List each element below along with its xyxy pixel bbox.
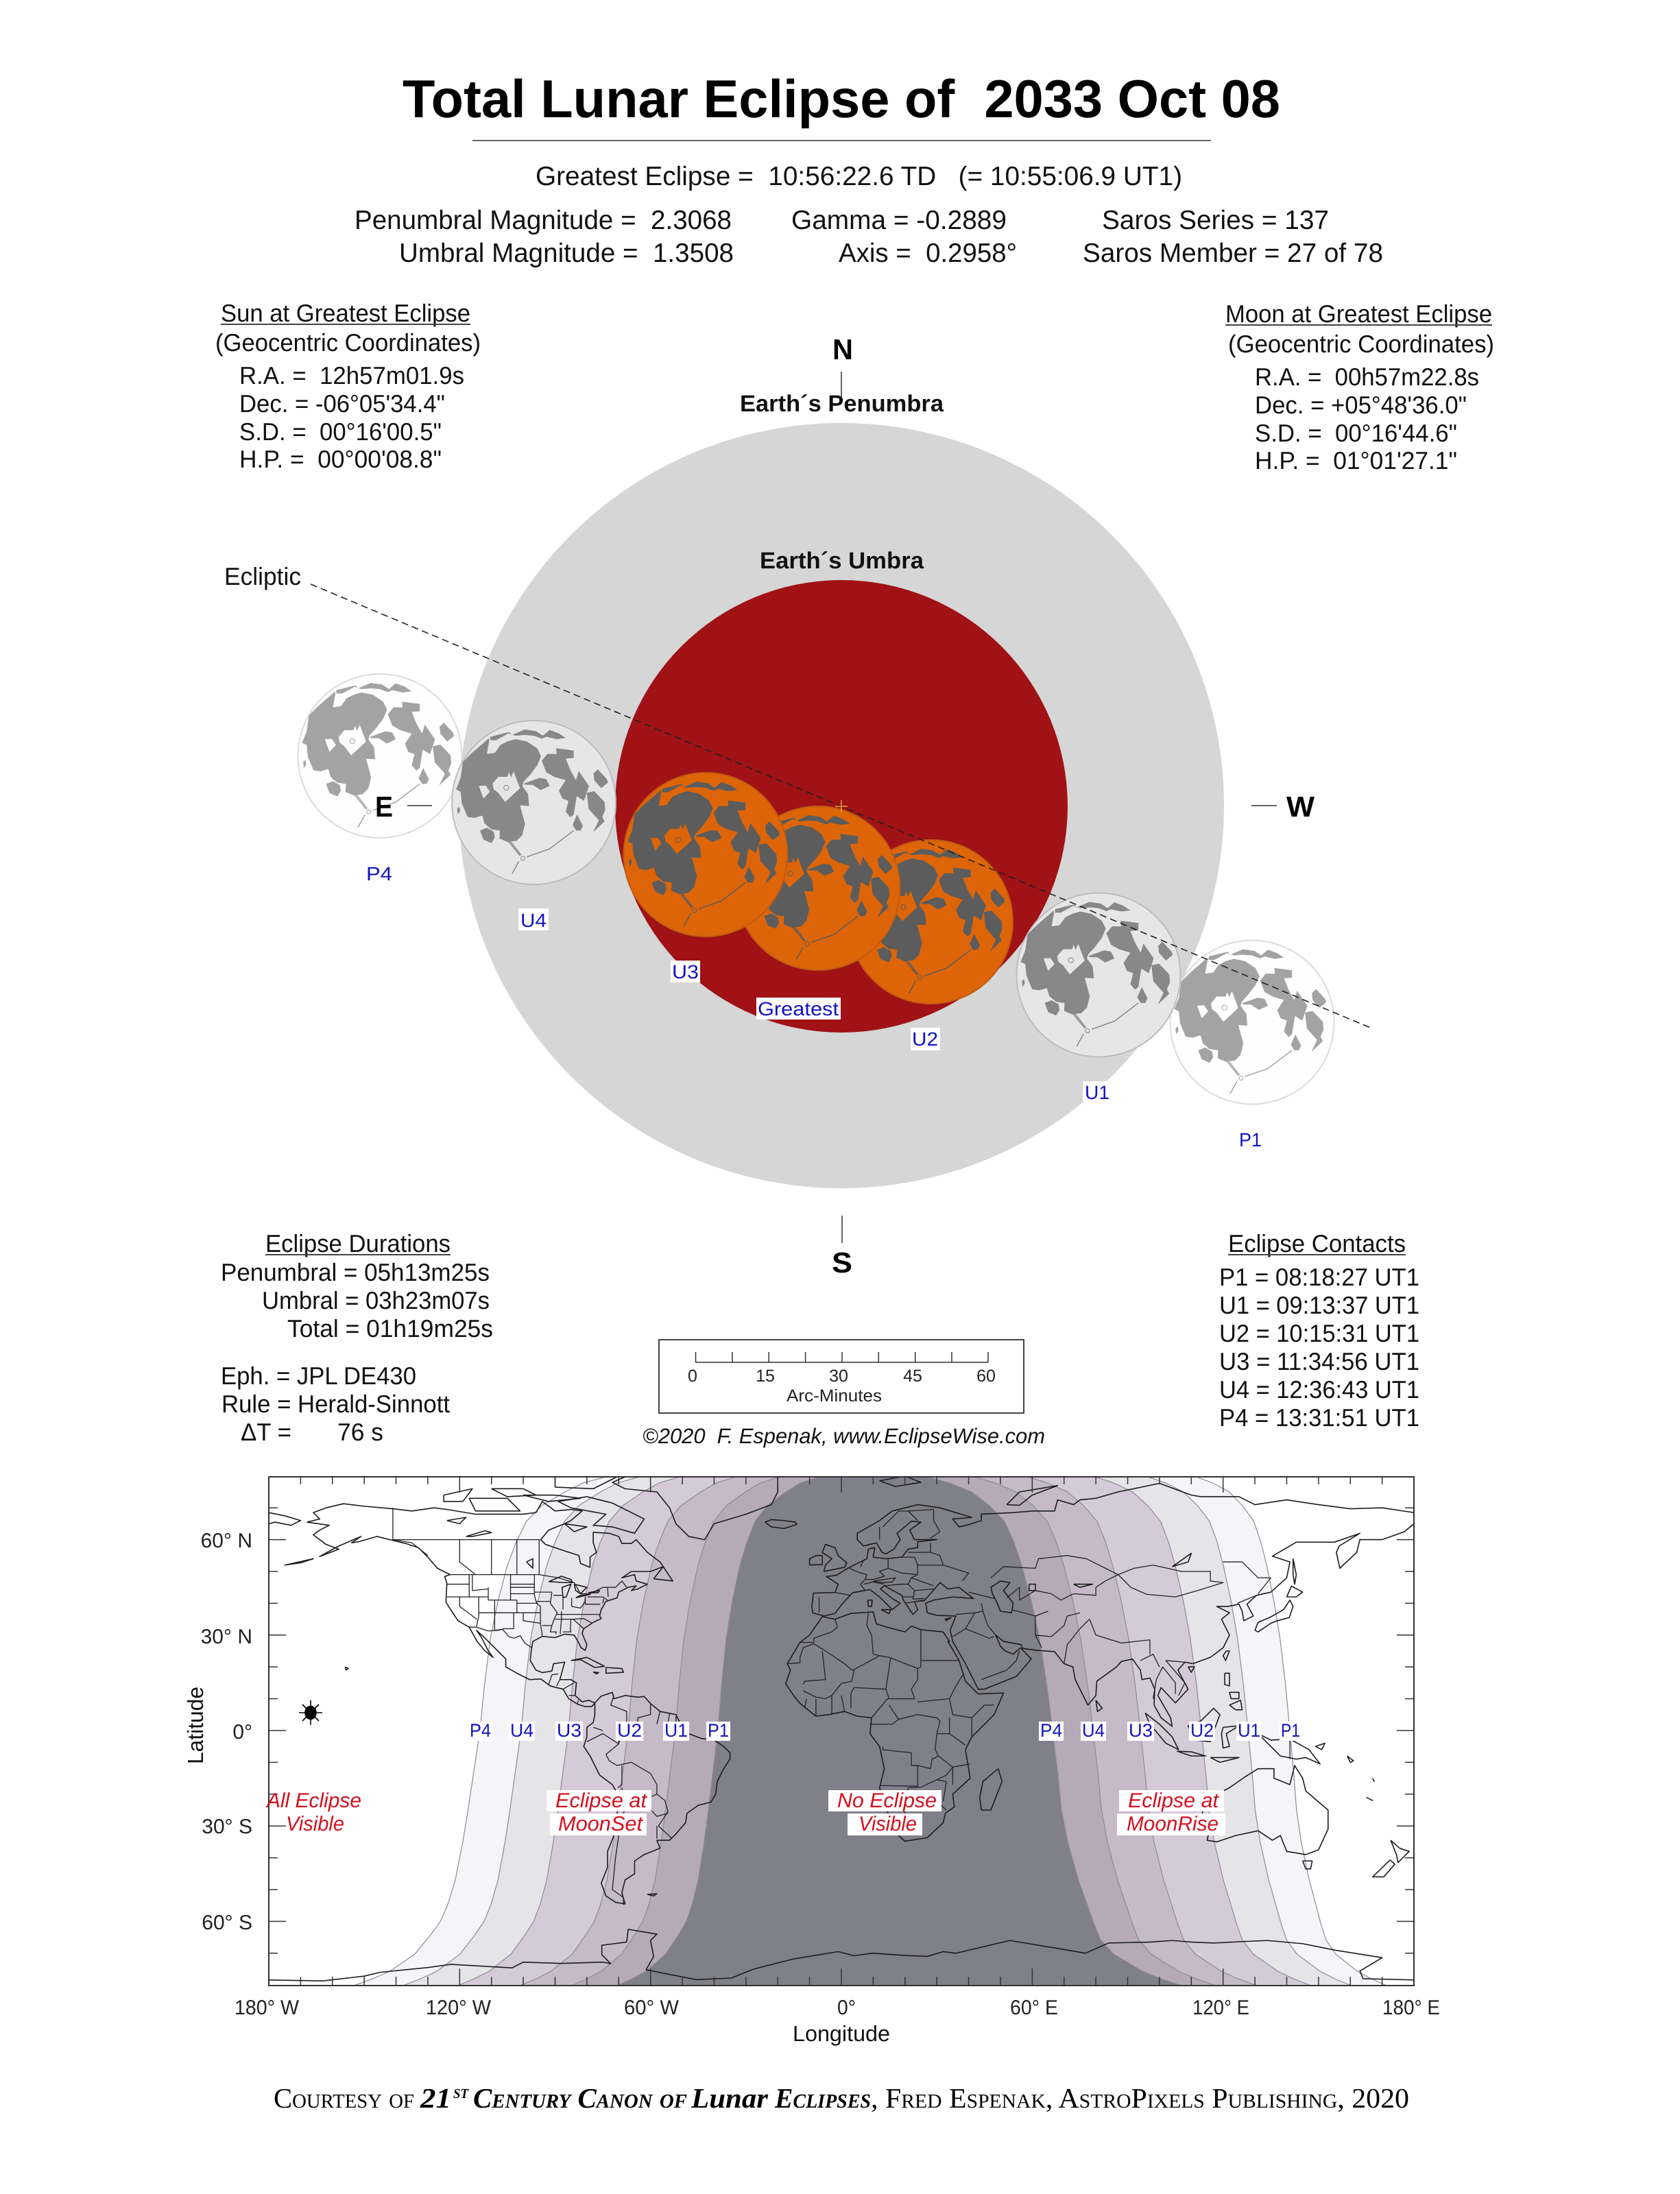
scale bar box: 45 <box>903 1366 922 1386</box>
title rule <box>472 140 1211 141</box>
text block: magnitudes <box>355 206 734 268</box>
visibility label: no eclipse: No Eclipse <box>837 1789 937 1812</box>
map frame and ticks <box>269 1476 1414 1986</box>
latitude tick labels: 30° N <box>201 1626 252 1648</box>
longitude tick labels: 60° E <box>1010 1997 1058 2019</box>
visibility label: eclipse at moonrise <box>1117 1789 1225 1835</box>
longitude tick labels: 120° W <box>426 1997 492 2019</box>
title: Total Lunar Eclipse of 2033 Oct 08 <box>403 69 1280 129</box>
moon: U4 <box>452 721 616 884</box>
ecliptic line <box>311 584 1372 1028</box>
map contact labels west: P4 <box>470 1720 491 1741</box>
visibility bands: west <box>355 1478 841 1985</box>
umbra disc <box>615 580 1068 1033</box>
scale bar box: Arc-Minutes <box>787 1386 882 1406</box>
text block: ephemeris: ΔT = <box>241 1418 291 1446</box>
latitude tick labels <box>201 1530 252 1934</box>
visibility bands: east <box>841 1478 1386 1985</box>
compass west <box>1251 791 1315 823</box>
moon: U3 <box>624 773 787 937</box>
moon: U2 <box>849 840 1013 1004</box>
map contact labels east: U4 <box>1082 1720 1105 1741</box>
map contact labels west: U2 <box>617 1720 642 1741</box>
panel: sun at greatest eclipse: H.P. = 00°00'08.8" <box>239 445 442 473</box>
panel: eclipse contacts: U1 = 09:13:37 UT1 <box>1219 1291 1419 1319</box>
contact labels: P1 <box>1239 1129 1262 1150</box>
panel: eclipse durations: Umbral = 03h23m07s <box>262 1286 490 1314</box>
panel: moon at greatest eclipse: R.A. = 00h57m22.8s <box>1255 363 1479 391</box>
compass south: S <box>832 1246 852 1279</box>
visibility label: eclipse at moonset: Eclipse at <box>555 1789 648 1812</box>
compass east: E <box>375 791 393 823</box>
compass south <box>832 1216 852 1279</box>
panel: eclipse durations: Penumbral = 05h13m25s <box>221 1258 490 1286</box>
footer credit: Eclipses <box>774 2082 871 2114</box>
visibility label: all eclipse <box>265 1789 361 1835</box>
latitude tick labels: 0° <box>232 1721 252 1744</box>
panel: moon at greatest eclipse <box>1225 300 1494 474</box>
text block: saros: Saros Series = 137 <box>1102 206 1329 235</box>
map contact labels east: P1 <box>1281 1720 1300 1741</box>
map contact labels west: U1 <box>664 1720 688 1741</box>
panel: eclipse durations: Eclipse Durations <box>265 1229 451 1257</box>
scale bar box <box>659 1340 1024 1413</box>
label: earth's penumbra: Earth´s Penumbra <box>740 391 944 417</box>
moon: U1 <box>1016 893 1181 1057</box>
moon: P1 <box>1170 941 1334 1104</box>
compass north <box>832 333 853 398</box>
longitude tick labels <box>235 1997 1440 2019</box>
panel: eclipse contacts <box>1219 1229 1419 1432</box>
panel: moon at greatest eclipse: Moon at Greatest Eclipse <box>1225 300 1492 328</box>
contact labels: U4 <box>520 910 547 931</box>
panel: sun at greatest eclipse: (Geocentric Coordinates) <box>215 328 481 357</box>
footer credit: 21 <box>420 2082 451 2114</box>
text block: saros: Saros Member = 27 of 78 <box>1083 239 1383 268</box>
shadow centre cross <box>835 800 848 812</box>
longitude tick labels: 0° <box>837 1997 856 2019</box>
visibility label: no eclipse <box>828 1789 941 1835</box>
map contact labels east: U1 <box>1238 1720 1260 1741</box>
footer credit: Lunar <box>691 2082 769 2114</box>
world map coastlines <box>269 1467 1414 1981</box>
panel: eclipse durations: Total = 01h19m25s <box>287 1314 493 1342</box>
contact labels: Greatest <box>758 998 839 1020</box>
visibility label: eclipse at moonset: MoonSet <box>558 1813 644 1835</box>
panel: eclipse contacts: P1 = 08:18:27 UT1 <box>1219 1263 1419 1291</box>
map contact labels west: U4 <box>510 1720 533 1741</box>
text block: ephemeris: Eph. = JPL DE430 <box>221 1362 416 1390</box>
visibility label: eclipse at moonrise: Eclipse at <box>1128 1789 1220 1812</box>
panel: moon at greatest eclipse: Dec. = +05°48'36.0" <box>1255 391 1467 419</box>
moon: greatest <box>736 806 900 970</box>
longitude tick labels: 60° W <box>624 1997 680 2019</box>
political borders <box>393 1508 1290 1905</box>
footer credit: Century Canon of <box>473 2082 687 2114</box>
footer credit <box>274 2082 1409 2114</box>
map contact labels east: U3 <box>1129 1720 1153 1741</box>
footer credit: Courtesy of <box>274 2082 414 2114</box>
axis title: latitude: Latitude <box>183 1687 208 1764</box>
label: earth's umbra: Earth´s Umbra <box>760 548 924 574</box>
visibility label: no eclipse: Visible <box>859 1813 917 1835</box>
scale bar box: 15 <box>756 1366 775 1386</box>
panel: moon at greatest eclipse: H.P. = 01°01'27.1" <box>1255 446 1457 474</box>
compass north: N <box>832 333 853 365</box>
contact labels: U1 <box>1085 1082 1109 1103</box>
panel: sun at greatest eclipse: S.D. = 00°16'00.5" <box>239 418 442 446</box>
compass west: W <box>1286 791 1315 823</box>
visibility label: eclipse at moonset <box>547 1789 651 1835</box>
visibility label: all eclipse: Visible <box>286 1813 344 1835</box>
map contact labels east: P4 <box>1040 1720 1062 1741</box>
label: ecliptic: Ecliptic <box>224 562 301 590</box>
axis title: longitude: Longitude <box>793 2021 890 2046</box>
footer credit: , Fred Espenak, AstroPixels Publishing, 2020 <box>871 2082 1409 2114</box>
latitude tick labels: 60° S <box>202 1912 252 1934</box>
panel: sun at greatest eclipse <box>215 299 481 473</box>
longitude tick labels: 180° W <box>235 1997 300 2019</box>
scale bar box: 60 <box>976 1366 996 1386</box>
text block: gamma and axis <box>791 206 1017 268</box>
text block: magnitudes: Penumbral Magnitude = 2.3068 <box>355 206 732 235</box>
footer credit: ST <box>453 2086 469 2101</box>
icon: sun position <box>299 1700 322 1725</box>
text block: ephemeris: Rule = Herald-Sinnott <box>221 1390 450 1418</box>
contact labels <box>366 863 1262 1150</box>
panel: moon at greatest eclipse: S.D. = 00°16'44.6" <box>1255 419 1457 447</box>
panel: eclipse contacts: P4 = 13:31:51 UT1 <box>1219 1403 1419 1432</box>
map contact labels west: U3 <box>557 1720 581 1741</box>
panel: eclipse contacts: Eclipse Contacts <box>1228 1229 1406 1257</box>
moon: P4 <box>298 674 462 838</box>
panel: sun at greatest eclipse: R.A. = 12h57m01.9s <box>239 361 464 389</box>
panel: eclipse contacts: U2 = 10:15:31 UT1 <box>1219 1319 1419 1347</box>
map contact labels east: U2 <box>1190 1720 1214 1741</box>
longitude tick labels: 120° E <box>1192 1997 1249 2019</box>
panel: moon at greatest eclipse: (Geocentric Coordinates) <box>1228 330 1494 358</box>
panel: sun at greatest eclipse: Dec. = -06°05'34.4" <box>239 389 445 418</box>
map contact labels east <box>1039 1720 1301 1741</box>
map contact labels west: P1 <box>708 1720 729 1741</box>
text block: gamma and axis: Gamma = -0.2889 <box>791 206 1007 235</box>
scale bar box: 0 <box>688 1366 697 1386</box>
visibility label: all eclipse: All Eclipse <box>265 1789 361 1812</box>
latitude tick labels: 60° N <box>201 1530 252 1552</box>
panel: eclipse contacts: U4 = 12:36:43 UT1 <box>1219 1375 1419 1403</box>
panel: eclipse contacts: U3 = 11:34:56 UT1 <box>1219 1347 1419 1375</box>
text block: ephemeris <box>221 1362 450 1446</box>
contact labels: U2 <box>912 1028 938 1050</box>
map contact labels west <box>468 1720 730 1741</box>
text block: greatest eclipse: Greatest Eclipse = 10:56:22.6 TD (= 10:55:06.9 UT1) <box>536 162 1182 191</box>
compass east <box>375 791 432 823</box>
longitude tick labels: 180° E <box>1382 1997 1440 2019</box>
scale bar box: 30 <box>829 1366 848 1386</box>
copyright: ©2020 F. Espenak, www.EclipseWise.com <box>643 1424 1045 1448</box>
penumbra disc <box>459 423 1224 1188</box>
panel: eclipse durations <box>221 1229 493 1342</box>
contact labels: P4 <box>366 863 392 884</box>
text block: ephemeris: 76 s <box>337 1418 383 1446</box>
latitude tick labels: 30° S <box>202 1816 252 1838</box>
contact labels: U3 <box>672 961 699 983</box>
text block: gamma and axis: Axis = 0.2958° <box>839 239 1017 268</box>
text block: saros <box>1083 206 1383 268</box>
visibility label: eclipse at moonrise: MoonRise <box>1127 1813 1219 1835</box>
panel: sun at greatest eclipse: Sun at Greatest Eclipse <box>221 299 470 327</box>
text block: magnitudes: Umbral Magnitude = 1.3508 <box>399 239 734 268</box>
